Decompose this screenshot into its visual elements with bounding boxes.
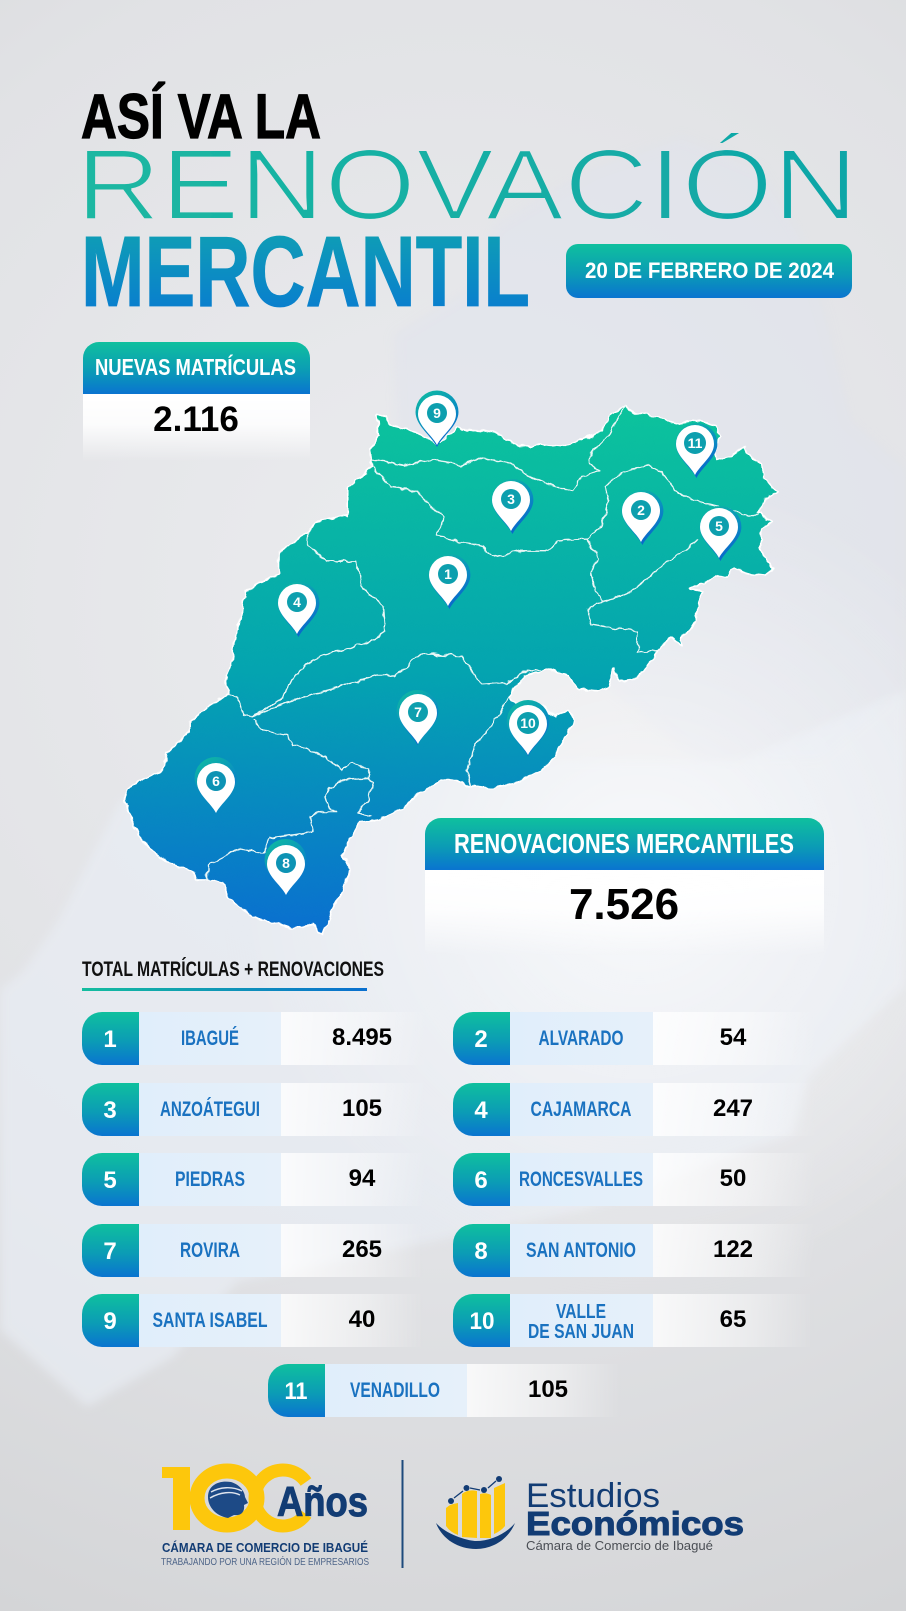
pin 7: 7 <box>414 704 422 720</box>
panel: renovaciones mercantiles: 7.526 <box>569 880 679 929</box>
row: San Antonio: 8 <box>474 1238 488 1265</box>
pin 1: 1 <box>444 566 452 582</box>
row: Valle de San Juan: 10 <box>470 1308 494 1335</box>
row: Santa Isabel: 9 <box>103 1308 117 1335</box>
pin 2 <box>622 490 663 545</box>
row: Anzoátegui <box>82 1083 425 1136</box>
row: Cajamarca: 247 <box>713 1095 753 1122</box>
panel: nuevas matrículas: NUEVAS MATRÍCULAS <box>95 353 296 380</box>
pin 9: 9 <box>433 405 441 421</box>
logo: Estudios Económicos: Estudios <box>526 1477 660 1515</box>
row: Roncesvalles: 50 <box>720 1165 746 1192</box>
panel: nuevas matrículas <box>83 342 310 462</box>
row: San Antonio <box>453 1224 815 1277</box>
row: Alvarado: 2 <box>474 1026 488 1053</box>
row: Cajamarca <box>453 1083 815 1136</box>
table heading <box>82 958 384 991</box>
icon: bar chart <box>436 1476 515 1549</box>
row: Venadillo: VENADILLO <box>350 1379 440 1402</box>
row: Venadillo: 11 <box>284 1378 308 1405</box>
row: Alvarado: ALVARADO <box>538 1027 624 1050</box>
pin 6 <box>195 757 236 813</box>
pin 3 <box>492 479 533 534</box>
panel: renovaciones mercantiles <box>425 818 824 955</box>
pin 7 <box>397 690 438 745</box>
panel: nuevas matrículas: 2.116 <box>153 400 239 439</box>
panel: renovaciones mercantiles: RENOVACIONES MERCANTILES <box>454 828 794 859</box>
pin 4 <box>278 582 319 637</box>
logo: 100 Años Cámara de Comercio de Ibagué <box>161 1467 369 1568</box>
divider <box>402 1460 404 1568</box>
row: San Antonio: SAN ANTONIO <box>526 1239 636 1262</box>
row: Roncesvalles <box>453 1153 815 1206</box>
row: Venadillo: 105 <box>528 1376 568 1403</box>
title <box>76 82 858 328</box>
row: Venadillo <box>268 1364 622 1417</box>
row: San Antonio: 122 <box>713 1236 753 1263</box>
icon: profile head <box>208 1482 248 1518</box>
row: Santa Isabel: 40 <box>349 1306 375 1333</box>
map pins <box>195 390 741 895</box>
pin 5: 5 <box>715 518 723 534</box>
row: Ibagué: 1 <box>103 1026 117 1053</box>
pin 8 <box>265 839 306 895</box>
logo: Estudios Económicos: Cámara de Comercio de Ibagué <box>526 1538 713 1553</box>
table heading: TOTAL MATRÍCULAS + RENOVACIONES <box>82 958 384 981</box>
row: Ibagué <box>82 1012 425 1065</box>
row: Valle de San Juan: VALLE <box>556 1301 606 1323</box>
pin 9 <box>416 390 458 447</box>
row: Rovira: ROVIRA <box>180 1239 240 1262</box>
pin 11 <box>676 423 717 478</box>
row: Piedras <box>82 1153 425 1206</box>
row: Anzoátegui: 105 <box>342 1095 382 1122</box>
title line: RENOVACIÓN: RENOVACIÓN <box>76 129 858 241</box>
title line: MERCANTIL: MERCANTIL <box>81 216 530 328</box>
row: Ibagué: IBAGUÉ <box>181 1027 239 1050</box>
pin 5 <box>700 506 741 561</box>
row: Valle de San Juan <box>453 1294 815 1347</box>
row: Alvarado: 54 <box>720 1024 747 1051</box>
row: Piedras: 5 <box>103 1167 117 1194</box>
pin 2: 2 <box>637 502 645 518</box>
date badge: 20 DE FEBRERO DE 2024 <box>585 258 835 283</box>
pin 4: 4 <box>293 594 301 610</box>
row: Alvarado <box>453 1012 815 1065</box>
row: Santa Isabel <box>82 1294 425 1347</box>
pin 1 <box>429 554 470 609</box>
row: Cajamarca: 4 <box>474 1097 488 1124</box>
row: Valle de San Juan: 65 <box>720 1306 746 1333</box>
pin 11: 11 <box>688 435 703 451</box>
pin 8: 8 <box>282 855 290 871</box>
row: Rovira: 7 <box>103 1238 117 1265</box>
logo: 100 Años Cámara de Comercio de Ibagué: Años <box>277 1478 368 1525</box>
row: Piedras: 94 <box>349 1165 376 1192</box>
logo: 100 Años Cámara de Comercio de Ibagué: TRABAJANDO POR UNA REGIÓN DE EMPRESARIOS <box>161 1555 369 1568</box>
row: Anzoátegui: ANZOÁTEGUI <box>160 1098 260 1121</box>
yellow numeral 100 <box>162 1467 306 1530</box>
map of Tolima municipalities <box>125 406 776 935</box>
title line: ASÍ VA LA: ASÍ VA LA <box>81 82 321 152</box>
pin 3: 3 <box>507 491 515 507</box>
row: Cajamarca: CAJAMARCA <box>530 1098 632 1121</box>
row: Rovira <box>82 1224 425 1277</box>
row: Roncesvalles: RONCESVALLES <box>519 1168 643 1191</box>
pin 10 <box>507 700 549 756</box>
logo: Estudios Económicos: Económicos <box>526 1505 744 1542</box>
row: Roncesvalles: 6 <box>474 1167 488 1194</box>
date badge <box>566 244 852 298</box>
row: Ibagué: 8.495 <box>332 1024 392 1051</box>
row: Piedras: PIEDRAS <box>175 1168 245 1191</box>
pin 6: 6 <box>212 773 220 789</box>
row: Rovira: 265 <box>342 1236 382 1263</box>
logo: 100 Años Cámara de Comercio de Ibagué: CÁMARA DE COMERCIO DE IBAGUÉ <box>162 1540 368 1555</box>
row: Anzoátegui: 3 <box>103 1097 117 1124</box>
pin 10: 10 <box>520 715 536 731</box>
row: Valle de San Juan: DE SAN JUAN <box>528 1321 634 1343</box>
logo: Estudios Económicos <box>436 1476 744 1553</box>
row: Santa Isabel: SANTA ISABEL <box>152 1309 268 1332</box>
